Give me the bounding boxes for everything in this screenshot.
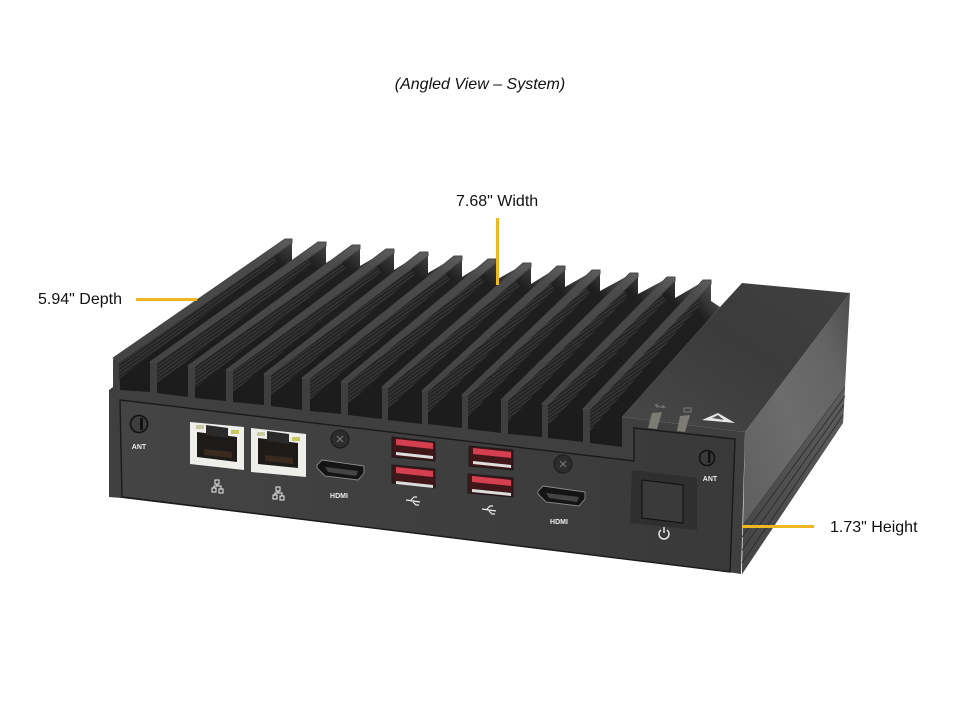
HDMI port 1 — [317, 460, 364, 480]
HDMI label 2: HDMI — [550, 519, 568, 526]
icon: warning triangle label — [702, 413, 735, 423]
right antenna connector: ANT — [703, 476, 718, 483]
heat sink fins — [113, 239, 720, 447]
USB port A — [392, 437, 435, 461]
product: mini system chassis — [109, 239, 850, 574]
icon: network 2 — [273, 487, 284, 500]
right antenna connector — [700, 450, 718, 483]
power button — [630, 470, 697, 530]
screw 2 — [554, 455, 572, 473]
dimension line: height — [742, 525, 814, 528]
left antenna connector — [130, 416, 148, 451]
status LED light pipes — [648, 404, 691, 432]
front I/O plate — [120, 400, 735, 572]
HDMI port 2 — [538, 486, 585, 506]
front chassis — [109, 356, 745, 574]
dimension label: depth: 5.94" Depth — [38, 291, 122, 308]
USB port D — [468, 474, 513, 497]
icon: USB 2 — [482, 506, 496, 514]
HDMI label 1: HDMI — [330, 493, 348, 500]
USB port B — [392, 465, 435, 488]
LAN port 2 — [251, 428, 306, 477]
icon: USB 1 — [406, 497, 420, 505]
icon: power symbol — [659, 527, 669, 539]
LAN port 1 — [190, 422, 244, 470]
solid top block — [622, 283, 850, 432]
right side face with ribs — [742, 293, 850, 574]
dimension label: width: 7.68" Width — [456, 193, 538, 210]
dimension label: height: 1.73" Height — [830, 519, 918, 536]
dimension line: width — [496, 218, 499, 285]
title: angled view caption: (Angled View – System) — [395, 76, 565, 93]
dimension line: depth — [136, 298, 197, 301]
left antenna connector: ANT — [132, 444, 147, 451]
screw 1 — [331, 430, 349, 448]
icon: network 1 — [212, 480, 223, 493]
USB port C — [469, 446, 513, 470]
